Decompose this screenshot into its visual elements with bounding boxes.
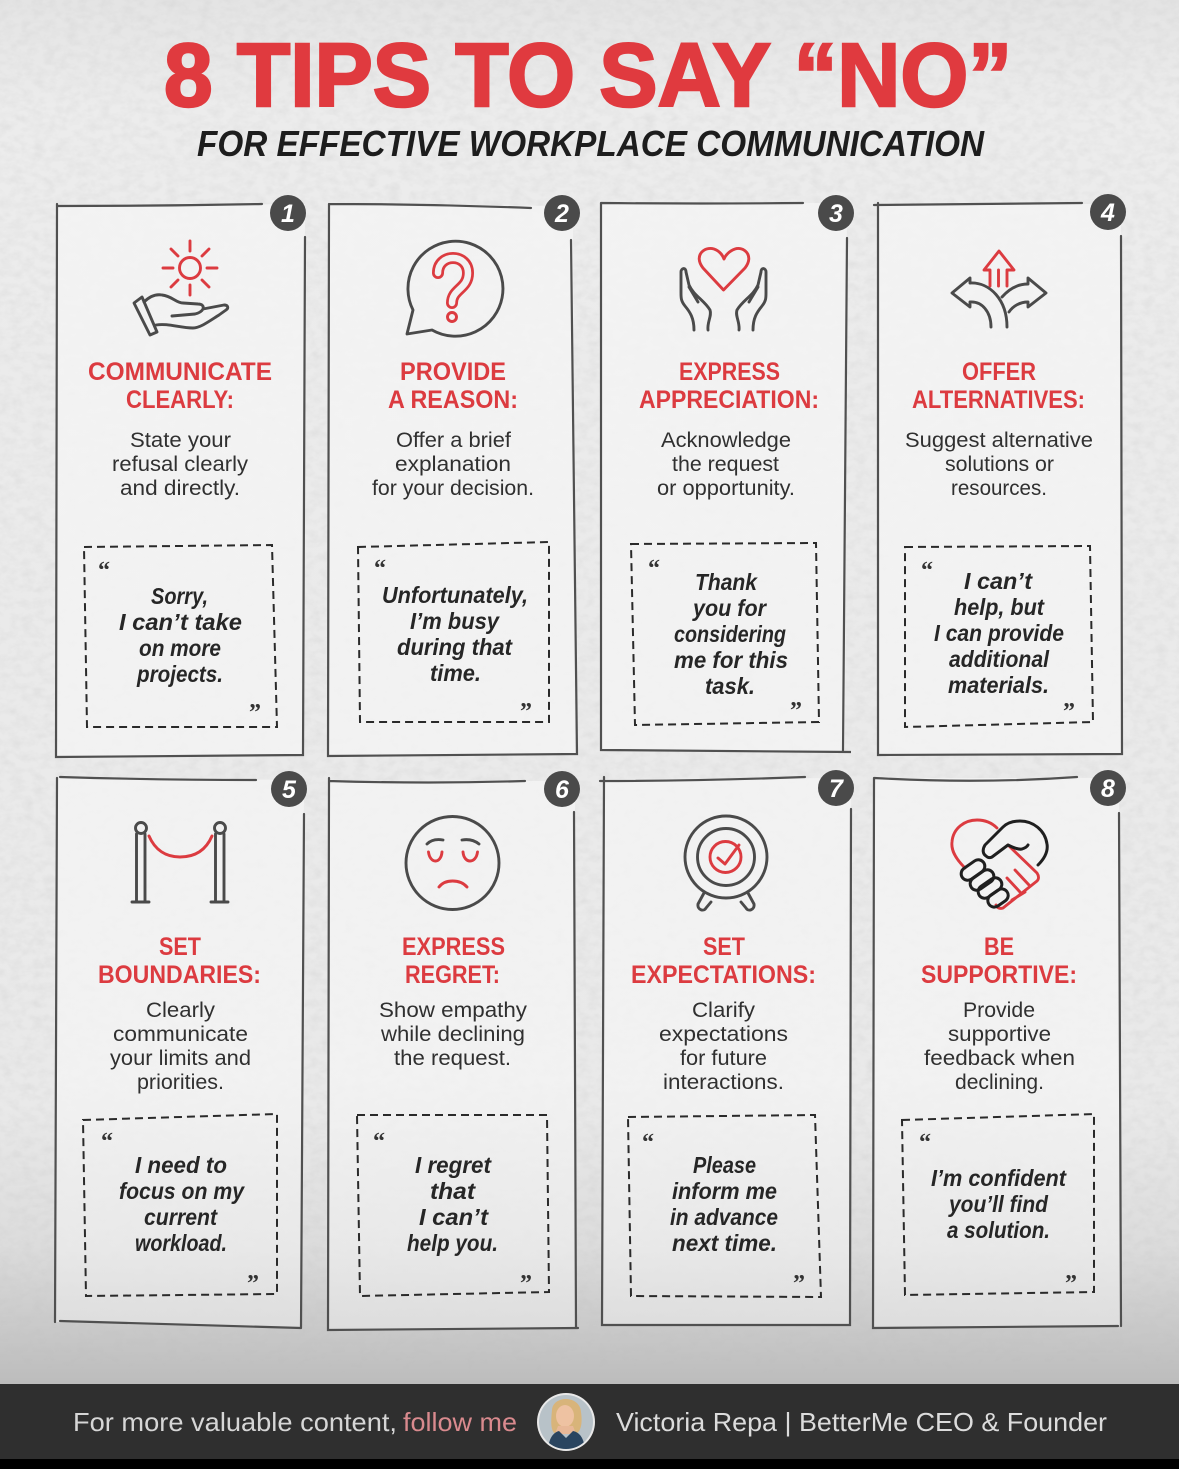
number badge 4	[1090, 194, 1126, 230]
description	[372, 429, 534, 500]
number badge 3	[818, 195, 854, 231]
icon: hand with sun	[134, 241, 228, 335]
quote box: “	[648, 556, 660, 582]
quote box: “	[101, 1129, 113, 1155]
follow me link: follow me	[403, 1407, 517, 1437]
quote box: during that	[397, 634, 513, 660]
heading: REGRET:	[405, 961, 500, 989]
icon: hands holding heart	[681, 248, 766, 330]
heading	[402, 933, 505, 989]
quote box: ”	[790, 698, 802, 724]
footer bar	[0, 1384, 1179, 1459]
description: and directly.	[120, 477, 240, 500]
avatar portrait	[537, 1393, 595, 1451]
quote box: help, but	[954, 594, 1045, 620]
description: the request.	[394, 1047, 511, 1070]
quote box: ”	[1065, 1271, 1077, 1297]
number badge 8	[1090, 770, 1126, 806]
description	[905, 429, 1093, 500]
quote box: workload.	[135, 1230, 227, 1256]
quote box: ”	[520, 699, 532, 725]
heading	[631, 933, 816, 989]
description: Suggest alternative	[905, 429, 1093, 452]
quote box: ”	[1063, 699, 1075, 725]
quote box: I can provide	[934, 620, 1064, 646]
panel 8: be supportive	[873, 770, 1126, 1328]
quote box: I’m busy	[410, 608, 500, 634]
quote box: I need to	[135, 1152, 227, 1178]
heading	[88, 358, 272, 414]
description: Clarify	[692, 999, 756, 1022]
description: priorities.	[137, 1071, 224, 1094]
quote box: next time.	[672, 1230, 777, 1256]
description	[379, 999, 528, 1070]
description	[110, 999, 251, 1094]
number badge 8: 8	[1101, 775, 1115, 803]
quote box: Thank	[695, 569, 758, 595]
quote box: I can’t	[964, 568, 1033, 594]
description: Show empathy	[379, 999, 528, 1022]
description: expectations	[659, 1023, 788, 1046]
description: Acknowledge	[661, 429, 791, 452]
number badge 2: 2	[554, 200, 569, 228]
description: or opportunity.	[657, 477, 795, 500]
heading: OFFER	[962, 358, 1036, 386]
author credit: Victoria Repa | BetterMe CEO & Founder	[616, 1407, 1107, 1437]
subtitle: FOR EFFECTIVE WORKPLACE COMMUNICATION	[197, 123, 985, 164]
panel 3: express appreciation	[601, 195, 854, 752]
quote box: focus on my	[119, 1178, 245, 1204]
quote box: task.	[705, 673, 755, 699]
description: for your decision.	[372, 477, 534, 500]
quote box	[628, 1115, 821, 1297]
quote box: help you.	[407, 1230, 498, 1256]
quote box: additional	[949, 646, 1050, 672]
number badge 4: 4	[1100, 199, 1115, 227]
description: explanation	[395, 453, 511, 476]
heading: EXPRESS	[679, 358, 780, 386]
heading: BOUNDARIES:	[98, 961, 261, 989]
icon: sad face	[406, 816, 499, 910]
panel 6: express regret	[328, 771, 580, 1330]
quote box: you’ll find	[948, 1191, 1049, 1217]
quote box: “	[98, 558, 110, 584]
quote box: on more	[139, 635, 221, 661]
heading: EXPRESS	[402, 933, 505, 961]
description: declining.	[955, 1071, 1044, 1094]
quote box	[358, 542, 549, 725]
icon: speech bubble question	[407, 241, 503, 336]
quote box: “	[374, 556, 386, 582]
heading	[639, 358, 819, 414]
quote box	[905, 546, 1093, 727]
quote box: time.	[430, 660, 481, 686]
heading: SET	[703, 933, 745, 961]
heading: PROVIDE	[400, 358, 506, 386]
description: feedback when	[924, 1047, 1075, 1070]
description: refusal clearly	[112, 453, 249, 476]
quote box: “	[919, 1130, 931, 1156]
quote box: that	[430, 1178, 476, 1204]
quote box: Please	[693, 1152, 756, 1178]
icon: rope stanchions	[132, 822, 228, 902]
number badge 2	[544, 195, 580, 231]
quote box: “	[373, 1129, 385, 1155]
panel 2: provide a reason	[328, 195, 580, 756]
number badge 1	[270, 195, 306, 231]
description	[659, 999, 788, 1094]
quote box: materials.	[948, 672, 1049, 698]
description: supportive	[948, 1023, 1051, 1046]
quote box: Sorry,	[151, 583, 208, 609]
quote box: projects.	[136, 661, 223, 687]
panel 1: communicate clearly	[56, 195, 306, 757]
description: while declining	[380, 1023, 525, 1046]
quote box	[631, 543, 819, 725]
quote box: “	[642, 1130, 654, 1156]
quote box: I’m confident	[931, 1165, 1067, 1191]
number badge 5	[271, 771, 307, 807]
description: solutions or	[945, 453, 1054, 476]
heading: SET	[159, 933, 201, 961]
number badge 7: 7	[829, 775, 844, 803]
quote box	[357, 1115, 549, 1297]
heading: APPRECIATION:	[639, 386, 819, 414]
quote box: Unfortunately,	[382, 582, 528, 608]
quote box: in advance	[670, 1204, 778, 1230]
description: for future	[680, 1047, 767, 1070]
quote box: I can’t	[419, 1204, 489, 1230]
description: State your	[130, 429, 231, 452]
quote box	[902, 1114, 1094, 1297]
heading: CLEARLY:	[126, 386, 234, 414]
quote box: inform me	[672, 1178, 777, 1204]
description	[112, 429, 249, 500]
quote box	[83, 1114, 277, 1297]
description: interactions.	[663, 1071, 784, 1094]
title: 8 TIPS TO SAY “NO”	[164, 26, 1012, 126]
quote box: “	[921, 558, 933, 584]
panel 4: offer alternatives	[874, 194, 1126, 755]
quote box: current	[144, 1204, 218, 1230]
quote box: considering	[674, 621, 786, 647]
description	[924, 999, 1075, 1094]
number badge 5: 5	[282, 776, 297, 804]
description: the request	[672, 453, 779, 476]
heading	[388, 358, 518, 414]
quote box: ”	[520, 1271, 532, 1297]
description	[657, 429, 795, 500]
icon: target with check	[685, 816, 767, 910]
number badge 6	[544, 771, 580, 807]
heading: SUPPORTIVE:	[921, 961, 1077, 989]
heading: EXPECTATIONS:	[631, 961, 816, 989]
heading: BE	[984, 933, 1014, 961]
description: communicate	[113, 1023, 248, 1046]
description: your limits and	[110, 1047, 251, 1070]
panel 7: set expectations	[600, 770, 854, 1325]
number badge 1: 1	[281, 200, 295, 228]
quote box: ”	[247, 1271, 259, 1297]
quote box: I can’t take	[119, 609, 242, 635]
description: Offer a brief	[396, 429, 511, 452]
heading	[921, 933, 1077, 989]
panel 5: set boundaries	[55, 771, 307, 1328]
quote box: a solution.	[947, 1217, 1050, 1243]
heading	[912, 358, 1085, 414]
quote box: you for	[692, 595, 767, 621]
description: resources.	[951, 477, 1047, 500]
description: Provide	[963, 999, 1035, 1022]
quote box	[84, 545, 277, 727]
quote box: me for this	[674, 647, 788, 673]
heading: COMMUNICATE	[88, 358, 272, 386]
quote box: ”	[249, 700, 261, 726]
icon: three-way arrows	[952, 251, 1046, 327]
quote box: ”	[793, 1271, 805, 1297]
heading: ALTERNATIVES:	[912, 386, 1085, 414]
call to action: For more valuable content,	[73, 1407, 397, 1437]
number badge 6: 6	[555, 776, 570, 804]
heading	[98, 933, 261, 989]
description: Clearly	[146, 999, 216, 1022]
quote box: I regret	[415, 1152, 492, 1178]
number badge 3: 3	[829, 200, 843, 228]
number badge 7	[818, 770, 854, 806]
heading: A REASON:	[388, 386, 518, 414]
icon: heart handshake	[952, 820, 1047, 910]
